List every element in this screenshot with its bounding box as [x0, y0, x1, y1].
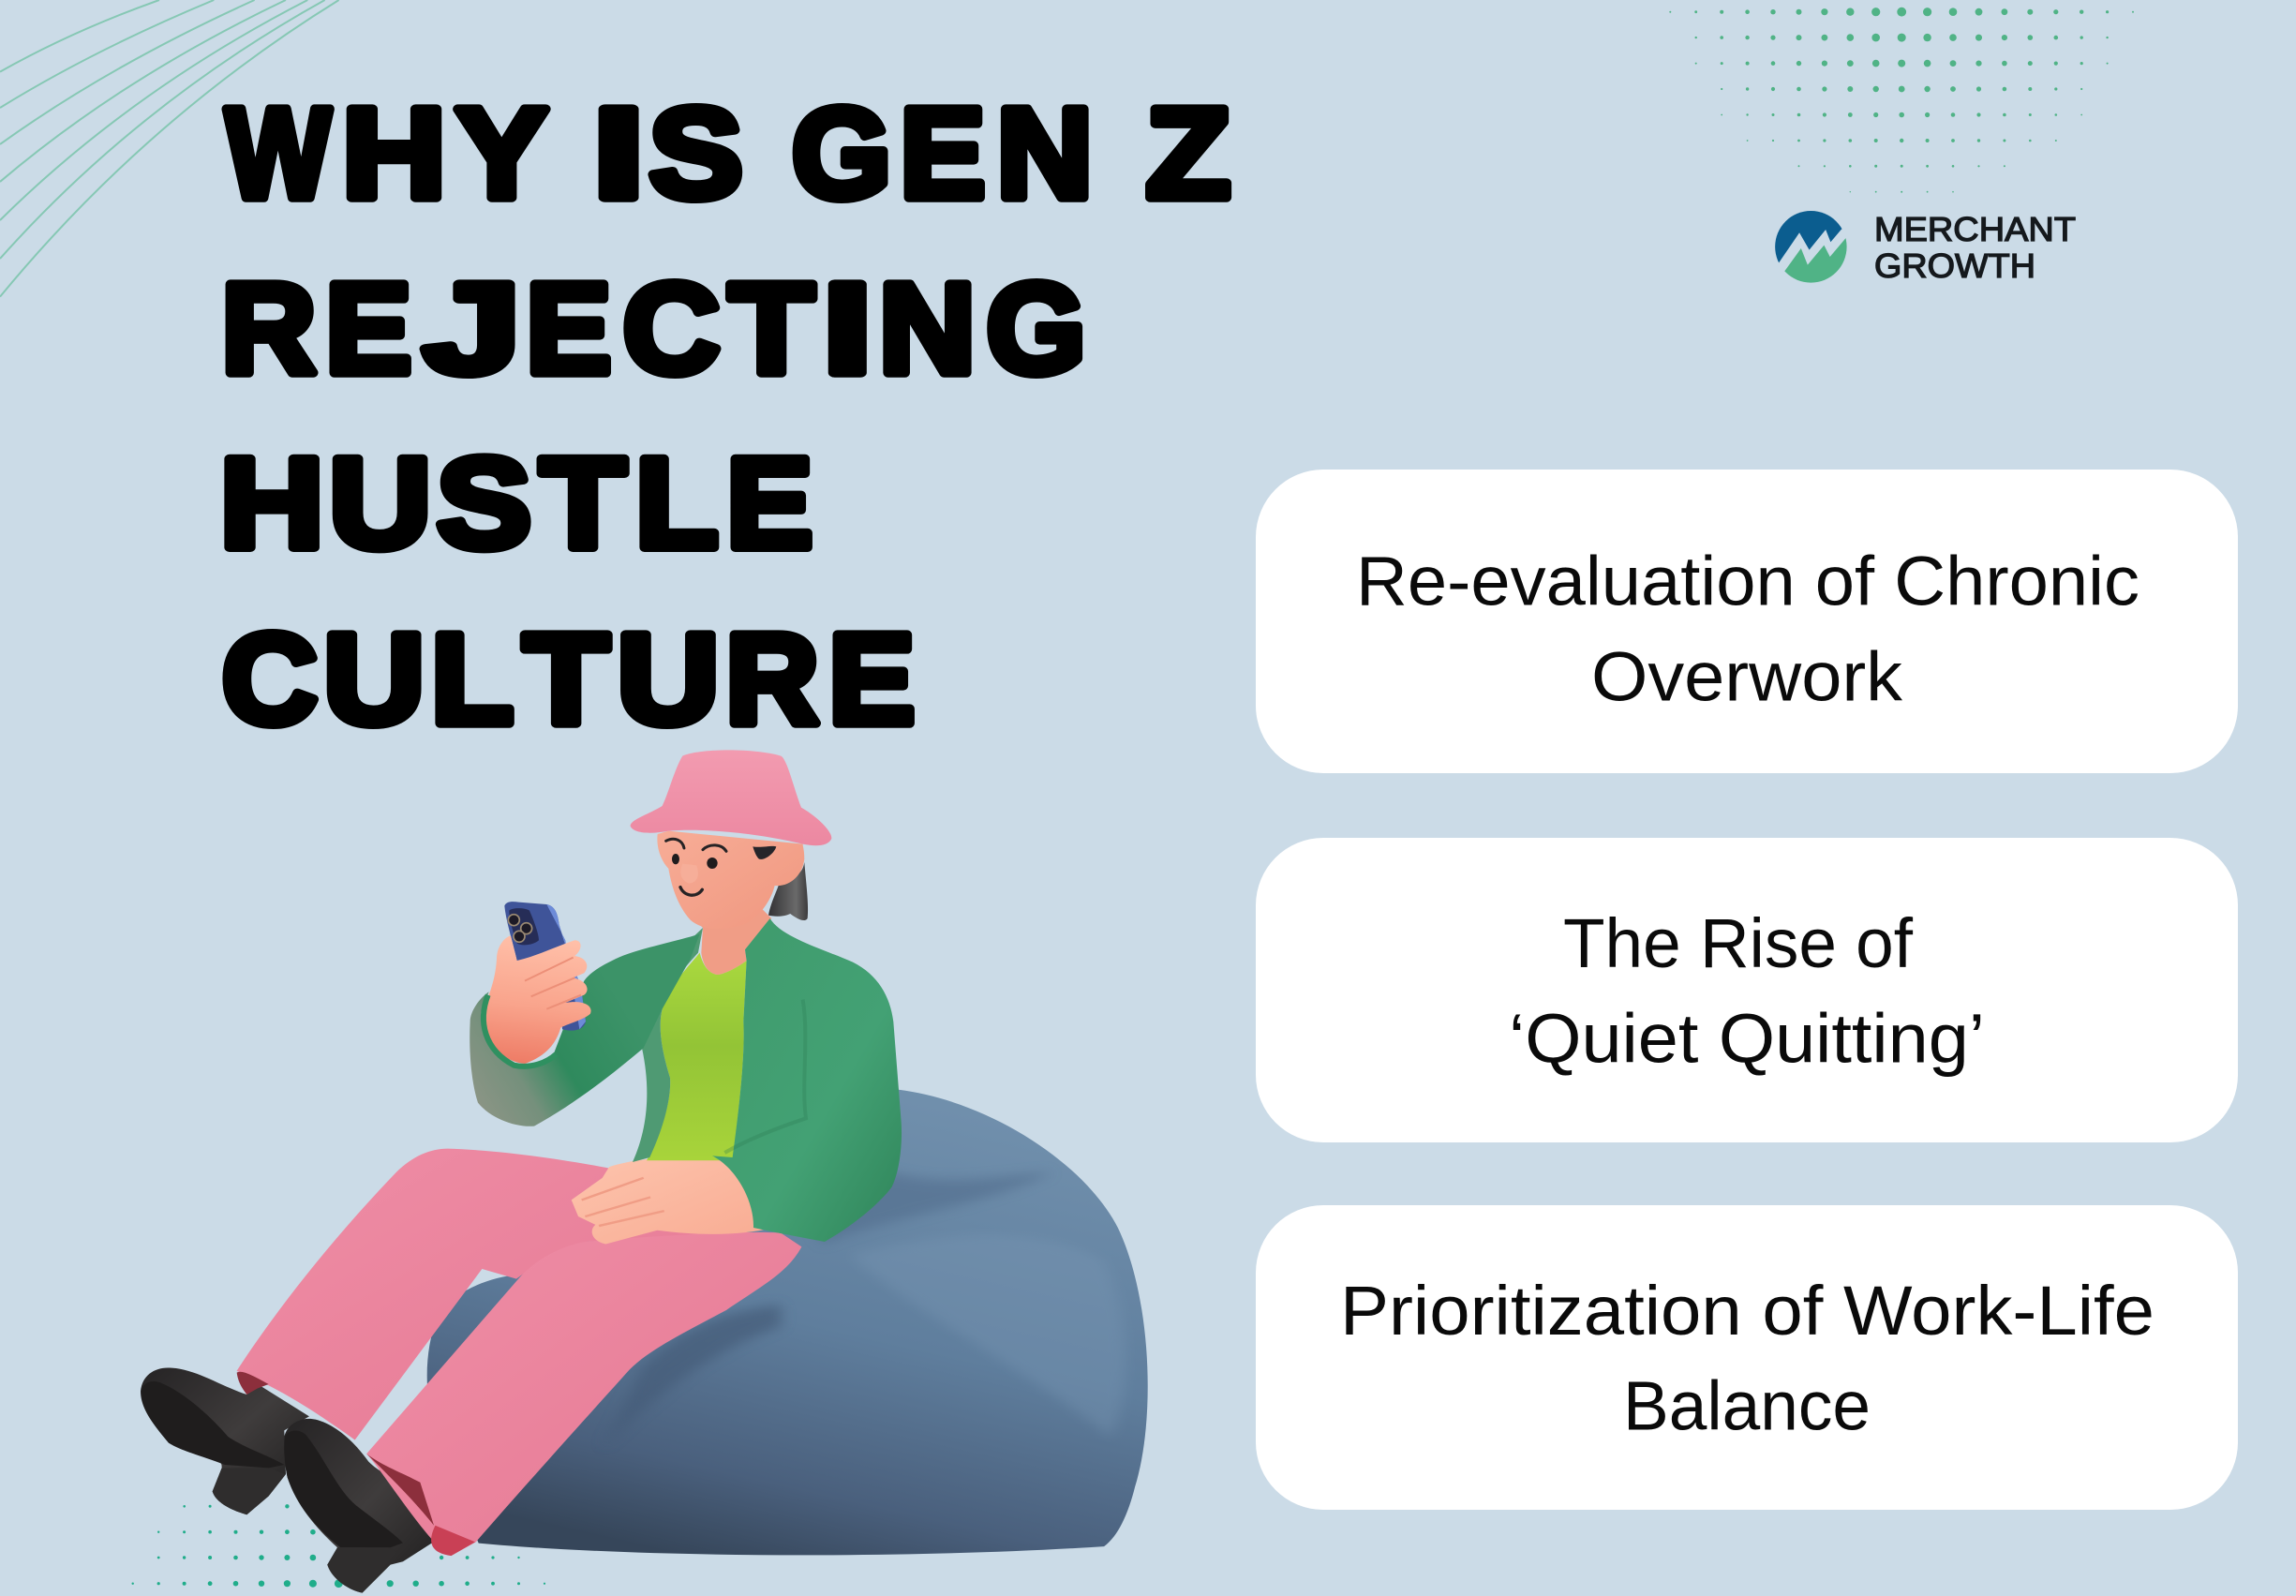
- title: H: [342, 82, 446, 226]
- right eye: [707, 858, 718, 869]
- beanbag: [427, 1090, 1148, 1555]
- title: S: [649, 82, 743, 226]
- head: [657, 831, 804, 929]
- hat: [631, 750, 831, 845]
- title: H: [220, 432, 324, 575]
- dot pattern top-right: [1669, 7, 2134, 193]
- card: prioritization of work-life balance: Balance: [1623, 1366, 1871, 1445]
- card: the rise of quiet quitting: The Rise of: [1563, 904, 1913, 982]
- title: N: [997, 82, 1093, 226]
- decorative curved lines top-left: [0, 0, 339, 297]
- title: W: [226, 82, 331, 226]
- smile: [680, 887, 702, 895]
- jacket left panel: [633, 928, 703, 1162]
- title: Z: [1146, 82, 1230, 226]
- card: prioritization of work-life balance: [1256, 1205, 2238, 1510]
- sleeve crease: [724, 1000, 806, 1153]
- card: re-evaluation of chronic overwork: [1256, 470, 2238, 773]
- title: S: [437, 432, 531, 575]
- title: C: [623, 258, 720, 401]
- title: T: [729, 258, 814, 401]
- title: T: [523, 608, 609, 752]
- illustration: person on beanbag using phone: [141, 750, 1148, 1593]
- title: E: [828, 608, 915, 752]
- near trouser leg: [366, 1232, 801, 1556]
- hand holding phone: [483, 935, 591, 1064]
- hand on knee: [572, 1157, 774, 1244]
- card: re-evaluation of chronic overwork: Overwork: [1591, 637, 1903, 716]
- nose: [680, 864, 698, 884]
- logo mark: [1775, 211, 1847, 283]
- title: E: [726, 432, 813, 575]
- dot pattern bottom-left: [131, 1504, 545, 1588]
- title: E: [325, 258, 411, 401]
- sleeve cuff: [484, 995, 556, 1066]
- hair tuft: [753, 846, 776, 859]
- shirt: [647, 953, 747, 1160]
- title: G: [792, 82, 891, 226]
- title: C: [222, 608, 318, 752]
- title: I: [823, 258, 872, 401]
- title: L: [431, 608, 514, 752]
- title: R: [221, 258, 316, 401]
- near boot: [284, 1419, 447, 1593]
- logo wordmark: MERCHANT: [1874, 210, 2076, 248]
- left eye: [672, 854, 679, 864]
- logo wordmark: GROWTH: [1874, 246, 2035, 285]
- card: the rise of quiet quitting: [1256, 838, 2238, 1142]
- far trouser leg: [237, 1149, 712, 1439]
- far trouser cuff interior: [237, 1372, 269, 1395]
- back hair: [768, 862, 808, 920]
- title: R: [725, 608, 819, 752]
- jacket right panel and forearm: [712, 918, 902, 1242]
- neck: [696, 909, 771, 975]
- finger creases: [525, 958, 581, 1009]
- title: T: [540, 432, 626, 575]
- raised arm sleeve: [470, 934, 700, 1126]
- phone: [504, 902, 586, 1031]
- far boot: [141, 1367, 309, 1514]
- eyebrows: [666, 839, 726, 851]
- card: the rise of quiet quitting: ‘Quiet Quitting’: [1509, 999, 1985, 1078]
- logo wordmark: [1874, 210, 2076, 285]
- title: [220, 82, 1230, 752]
- logo: Merchant Growth: [1775, 211, 2076, 283]
- title: N: [879, 258, 976, 401]
- card: prioritization of work-life balance: Prioritization of Work-Life: [1340, 1272, 2154, 1350]
- card: re-evaluation of chronic overwork: Re-evaluation of Chronic: [1356, 542, 2139, 620]
- title: E: [900, 82, 985, 226]
- title: L: [635, 432, 718, 575]
- title: G: [987, 258, 1086, 401]
- title: U: [323, 608, 425, 752]
- title: E: [526, 258, 611, 401]
- title: U: [617, 608, 720, 752]
- title: J: [424, 258, 521, 401]
- title: U: [329, 432, 431, 575]
- head, hat, torso and raised arm: [470, 750, 902, 1242]
- title: I: [593, 82, 645, 226]
- title: Y: [455, 82, 546, 226]
